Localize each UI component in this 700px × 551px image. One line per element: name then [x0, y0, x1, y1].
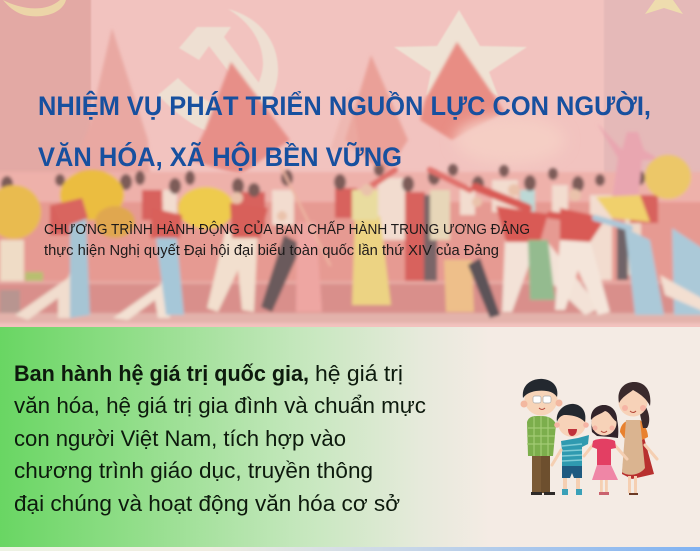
pink dancer — [600, 128, 655, 196]
subtitle: thực hiện Nghị quyết Đại hội đại biểu toàn quốc lần thứ XIV của Đảng — [44, 242, 499, 259]
girl — [584, 405, 627, 495]
top-right star — [645, 0, 683, 14]
title: VĂN HÓA, XÃ HỘI BỀN VỮNG — [38, 142, 402, 172]
front faces — [231, 184, 581, 221]
body text: văn hóa, hệ giá trị gia đình và chuẩn mực — [14, 393, 426, 418]
red flags — [70, 28, 505, 175]
title: NHIỆM VỤ PHÁT TRIỂN NGUỒN LỰC CON NGƯỜI, — [38, 91, 651, 121]
icon: family illustration — [520, 379, 657, 495]
front dancers — [15, 274, 72, 321]
back row heads — [1, 164, 645, 197]
back row bodies — [0, 178, 641, 292]
hammer and sickle emblem — [158, 10, 278, 130]
body text: con người Việt Nam, tích hợp vào — [14, 426, 346, 451]
crowd and stage photo — [0, 123, 700, 323]
body text: Ban hành hệ giá trị quốc gia, — [14, 361, 309, 386]
body text: chương trình giáo dục, truyền thông — [14, 458, 373, 483]
boy — [552, 404, 589, 495]
hero photo background — [0, 0, 700, 327]
body text — [14, 361, 426, 516]
title — [38, 91, 651, 172]
pale glow — [455, 116, 565, 164]
body text: đại chúng và hoạt động văn hóa cơ sở — [14, 491, 400, 516]
star — [394, 10, 527, 96]
subtitle: CHƯƠNG TRÌNH HÀNH ĐỘNG CỦA BAN CHẤP HÀNH TRUNG ƯƠNG ĐẢNG — [44, 220, 530, 238]
bottom strip — [0, 547, 700, 551]
subtitle — [44, 220, 530, 259]
top-left sickle emblem — [3, 0, 66, 16]
stage steps — [0, 284, 700, 314]
body text: hệ giá trị — [315, 361, 403, 386]
green gradient panel — [0, 327, 700, 547]
mother — [618, 382, 657, 495]
yellow fans — [0, 185, 41, 239]
father — [520, 379, 562, 495]
back row band — [0, 200, 700, 282]
arms — [280, 165, 630, 265]
